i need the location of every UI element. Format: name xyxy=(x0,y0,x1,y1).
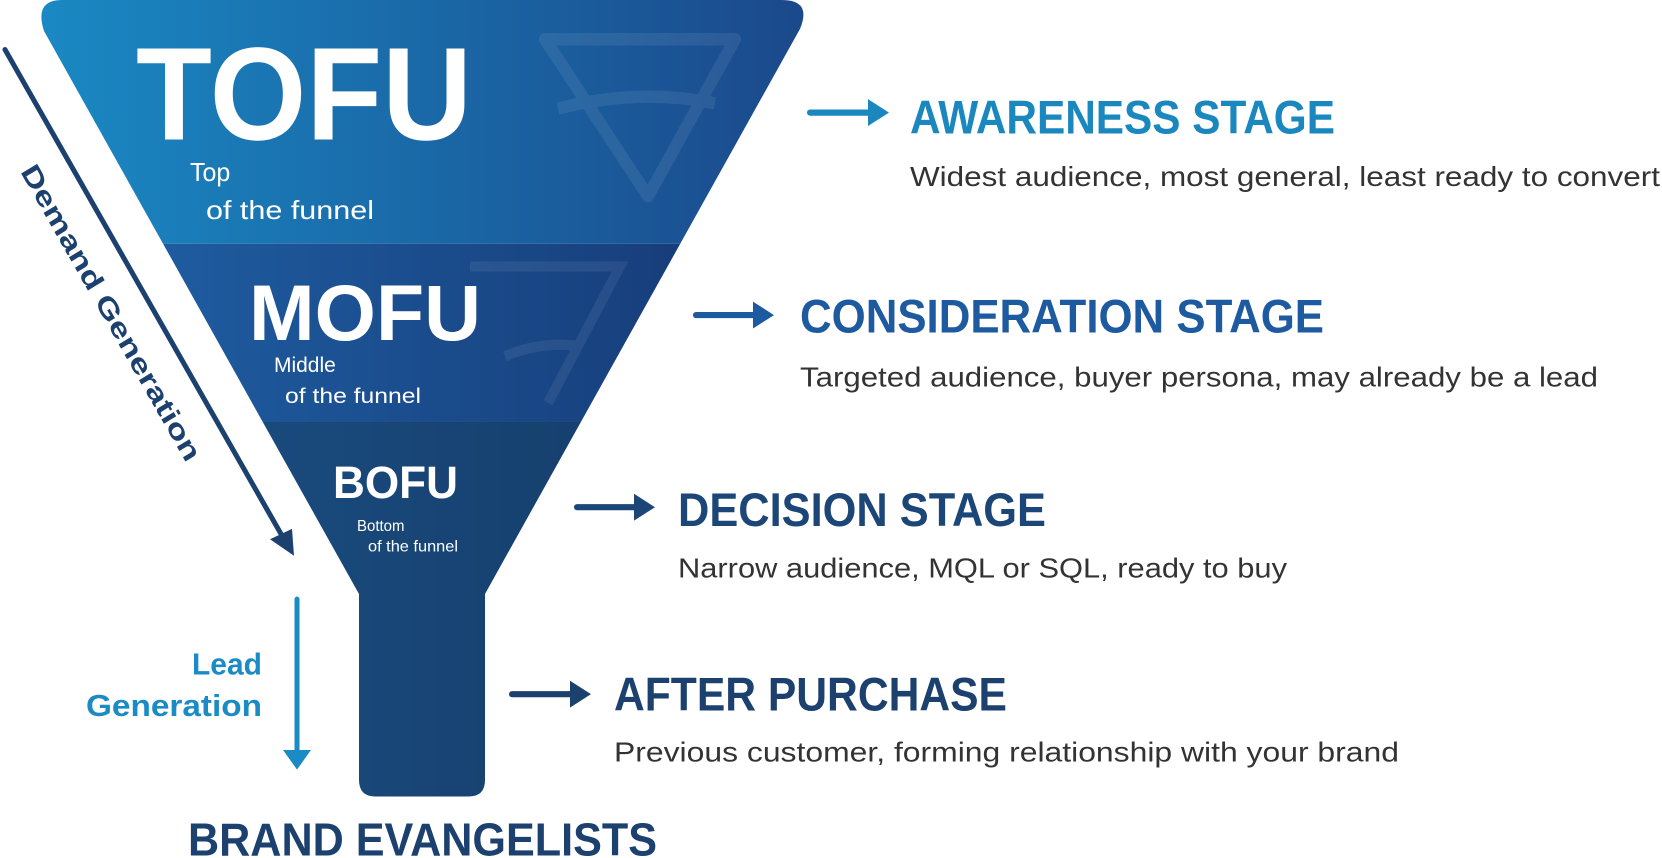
stage: decision xyxy=(577,483,1287,584)
TOFU label: TOFU xyxy=(136,20,472,168)
BOFU label: of the funnel xyxy=(368,538,458,556)
BOFU label: BOFU xyxy=(333,458,458,508)
stage: consideration xyxy=(696,290,1598,392)
stage: consideration: CONSIDERATION STAGE xyxy=(800,290,1324,343)
stage: decision: DECISION STAGE xyxy=(678,483,1046,536)
TOFU label: Top xyxy=(190,158,230,187)
BOFU label: Bottom xyxy=(357,518,404,535)
MOFU label: of the funnel xyxy=(285,384,421,408)
stage: after purchase: Previous customer, forming relationship with your brand xyxy=(614,736,1399,767)
stage: decision: Narrow audience, MQL or SQL, ready to buy xyxy=(678,552,1287,584)
stage: awareness xyxy=(810,91,1660,192)
arrow: demand generation: Demand Generation xyxy=(15,159,208,467)
stage: after purchase: AFTER PURCHASE xyxy=(614,668,1007,721)
arrow: lead generation xyxy=(86,599,311,770)
stage: awareness: AWARENESS STAGE xyxy=(910,91,1335,143)
stage: awareness: Widest audience, most general, least ready to convert xyxy=(910,161,1660,192)
arrow: demand generation xyxy=(5,50,294,556)
arrow: lead generation: Generation xyxy=(86,688,262,723)
TOFU label: of the funnel xyxy=(206,197,374,225)
stage: consideration: Targeted audience, buyer persona, may already be a lead xyxy=(800,361,1598,392)
MOFU label: MOFU xyxy=(249,270,481,357)
MOFU label xyxy=(249,270,481,408)
arrow: lead generation: Lead xyxy=(192,647,262,682)
BOFU label xyxy=(333,458,458,556)
funnel xyxy=(41,0,804,796)
stage: after purchase xyxy=(512,668,1399,767)
MOFU label: Middle xyxy=(274,353,336,377)
